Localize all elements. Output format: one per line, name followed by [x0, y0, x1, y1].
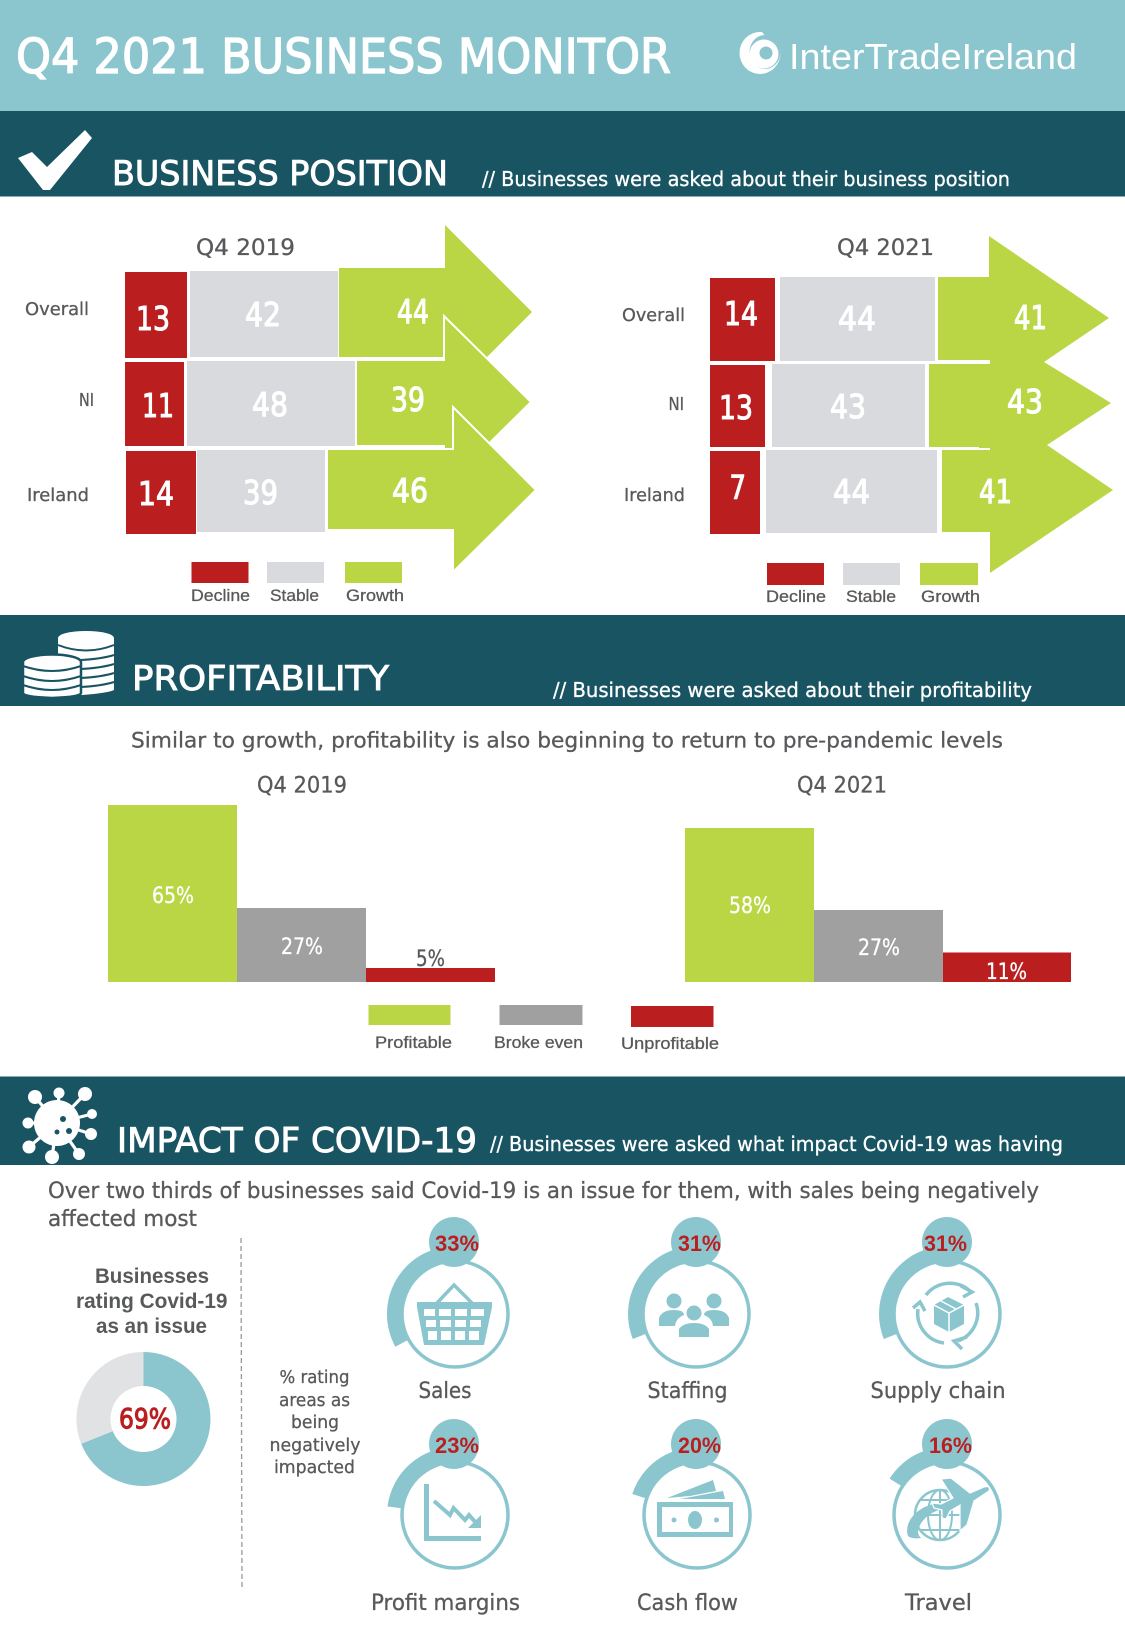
legend: Stable: [270, 586, 319, 605]
row: Ireland: 46: [392, 471, 428, 510]
legend: Decline: [191, 586, 250, 605]
text: covid summary: Over two thirds of businesses said Covid-19 is an issue for them, with sales being negatively: [48, 1179, 1039, 1204]
text: % rating areas as being negatively impacted: areas as: [279, 1390, 350, 1411]
subtitle: // Businesses were asked about their business position: [482, 167, 1010, 191]
chart title: Q4 2021: [837, 236, 934, 261]
metric: sales 33%: 33%: [435, 1231, 479, 1256]
bar chart: Q4 2019: Q4 2019: [257, 774, 347, 798]
row: Ireland: [27, 407, 536, 572]
label: Staffing: [648, 1379, 728, 1404]
heading: business position: BUSINESS POSITION: [112, 154, 448, 194]
panel: profitability: [0, 615, 1125, 1053]
row: overall: [25, 225, 532, 399]
text: % rating areas as being negatively impacted: being: [291, 1412, 339, 1433]
text: % rating areas as being negatively impacted: negatively: [270, 1435, 361, 1456]
icon: globe and plane: [907, 1478, 989, 1540]
icon: people: [659, 1294, 729, 1337]
metric: supply chain 31%: 31%: [924, 1231, 967, 1256]
legend: Broke even: [494, 1033, 583, 1052]
label: Supply chain: [870, 1379, 1006, 1404]
arrows: growth 2021: [925, 236, 1113, 573]
text: businesses rating covid-19 as an issue: [76, 1265, 228, 1338]
text: covid summary: affected most: [48, 1207, 197, 1232]
row: Ireland: 44: [833, 472, 870, 511]
bar chart: Q4 2019: 27%: [281, 935, 323, 960]
icon: box with circular arrows: [913, 1283, 978, 1349]
legend: Unprofitable: [621, 1034, 719, 1053]
icon: basket: [417, 1285, 492, 1345]
bar chart: Q4 2021: 11%: [986, 960, 1027, 985]
row: NI: 13: [719, 388, 753, 427]
row: Ireland: 39: [243, 473, 278, 512]
heading: impact of covid-19: IMPACT OF COVID-19: [117, 1121, 477, 1161]
legend: Stable: [846, 587, 896, 606]
row: Ireland: 14: [138, 474, 174, 513]
donut chart: 69%: 69%: [119, 1402, 171, 1435]
bar chart: Q4 2021: [685, 774, 1071, 985]
chart: Q4 2019 stacked arrows: [25, 225, 536, 605]
row: overall: Overall: [622, 305, 685, 326]
legend: Growth: [921, 587, 980, 606]
icon: check mark: [18, 130, 92, 190]
text: profitability summary: Similar to growth, profitability is also beginning to return to pre-pandemic levels: [131, 728, 1003, 752]
row: NI: 43: [1007, 382, 1043, 421]
row: overall: 44: [397, 292, 429, 331]
icon: coins: [23, 631, 114, 698]
legend: Profitable: [375, 1033, 452, 1052]
metric: staffing 31%: 31%: [678, 1231, 721, 1256]
row: NI: 11: [142, 386, 174, 425]
text: businesses rating covid-19 as an issue: Businesses: [95, 1265, 209, 1288]
row: overall: 44: [838, 299, 876, 338]
chart title: Q4 2019: [196, 236, 295, 261]
row: NI: NI: [668, 394, 684, 415]
legend: [368, 1005, 719, 1053]
icon: falling line chart: [424, 1484, 481, 1541]
metric: cash flow 20%: 20%: [678, 1433, 721, 1458]
metric: supply chain 31%: [870, 1217, 1006, 1404]
legend: [766, 563, 980, 606]
row: Ireland: 7: [730, 468, 746, 507]
row: overall: 41: [1014, 298, 1047, 337]
row: Ireland: Ireland: [624, 485, 685, 506]
row: NI: 48: [252, 385, 288, 424]
title: Q4 2021 BUSINESS MONITOR: [16, 29, 671, 85]
panel: business position: [0, 111, 1125, 606]
label: Profit margins: [371, 1591, 520, 1616]
bar chart: Q4 2021: Q4 2021: [797, 774, 887, 798]
row: NI: [79, 316, 531, 488]
metric: travel 16%: 16%: [929, 1433, 972, 1458]
metric: profit margins 23%: 23%: [435, 1433, 479, 1458]
bar chart: Q4 2019: [108, 774, 495, 982]
icon: virus: [22, 1087, 97, 1164]
label: Sales: [418, 1379, 472, 1404]
row: overall: 42: [245, 295, 281, 334]
panel: impact of covid-19: [0, 1076, 1125, 1616]
logo: InterTradeIreland: InterTradeIreland: [789, 36, 1077, 77]
bar chart: Q4 2021: 27%: [858, 936, 900, 961]
row: overall: 14: [724, 294, 758, 333]
row: Ireland: [624, 450, 1012, 534]
icon: banknotes: [657, 1480, 733, 1537]
legend: Growth: [346, 586, 404, 605]
metric: profit margins 23%: [371, 1419, 520, 1616]
heading: profitability: PROFITABILITY: [132, 659, 389, 699]
label: Travel: [904, 1591, 972, 1616]
metric: staffing 31%: [628, 1217, 749, 1404]
text: % rating areas as being negatively impacted: impacted: [274, 1457, 355, 1478]
text: businesses rating covid-19 as an issue: as an issue: [96, 1315, 207, 1338]
row: Ireland: Ireland: [27, 485, 89, 506]
chart: Q4 2021 stacked arrows: [622, 236, 1113, 606]
metric: sales 33%: [387, 1217, 508, 1404]
row: Ireland: 41: [979, 472, 1012, 511]
row: overall: 13: [136, 299, 170, 338]
row: NI: [668, 364, 1043, 447]
label: Cash flow: [637, 1591, 738, 1616]
row: overall: Overall: [25, 299, 89, 320]
bar chart: Q4 2019: 65%: [152, 884, 194, 909]
subtitle: // Businesses were asked what impact Covid-19 was having: [490, 1132, 1063, 1156]
text: covid summary: [48, 1179, 1039, 1232]
bar chart: Q4 2021: 58%: [729, 894, 771, 919]
row: NI: NI: [79, 390, 94, 411]
legend: Decline: [766, 587, 826, 606]
row: NI: 43: [830, 387, 866, 426]
donut chart: 69%: [76, 1352, 210, 1486]
row: NI: 39: [391, 380, 425, 419]
subtitle: // Businesses were asked about their profitability: [553, 678, 1032, 702]
header banner: [0, 0, 1125, 111]
row: overall: [622, 277, 1047, 361]
text: % rating areas as being negatively impacted: % rating: [280, 1367, 350, 1388]
bar chart: Q4 2019: 5%: [416, 947, 445, 972]
metric: cash flow 20%: [632, 1419, 750, 1616]
text: % rating areas as being negatively impacted: [270, 1367, 361, 1478]
metric: travel 16%: [890, 1419, 1000, 1616]
text: businesses rating covid-19 as an issue: rating Covid-19: [76, 1290, 228, 1313]
legend: [191, 562, 404, 605]
